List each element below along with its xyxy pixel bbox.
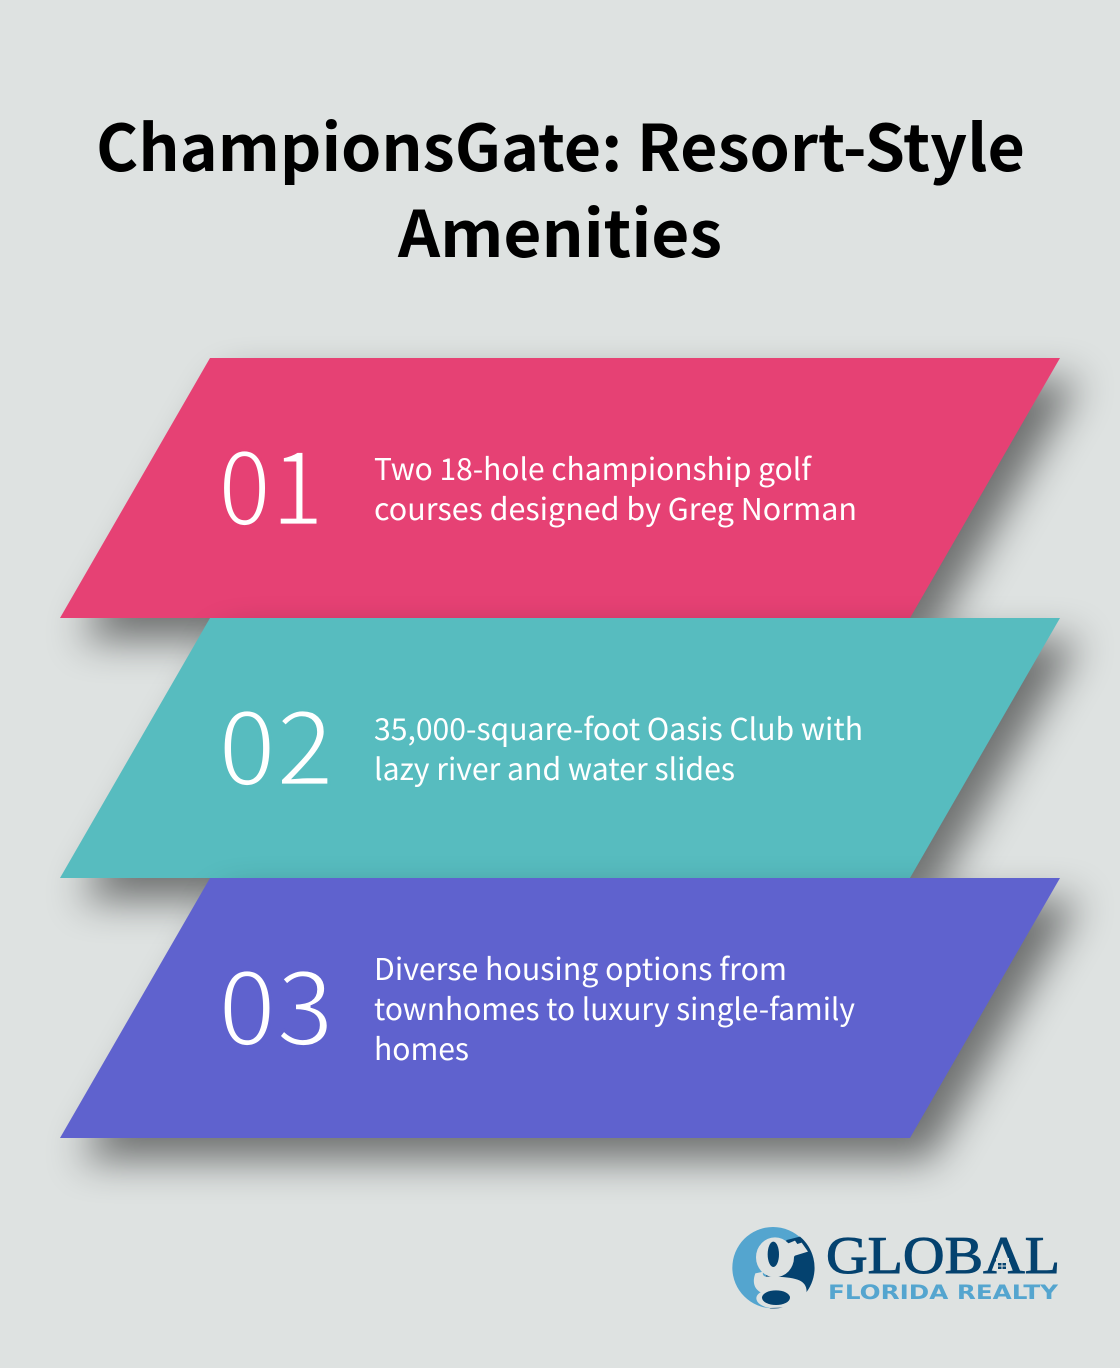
text: oasis club: 35,000-square-foot Oasis Club with	[374, 705, 863, 749]
title	[96, 98, 1025, 276]
text: housing	[374, 945, 855, 1069]
text: housing: townhomes to luxury single-family	[374, 985, 855, 1029]
text: housing: homes	[374, 1025, 469, 1069]
icon: g in circle	[732, 1227, 815, 1309]
number 03: 03	[218, 926, 334, 1075]
panel: 03 housing	[60, 878, 1080, 1160]
panel: 01 golf courses	[60, 358, 1080, 640]
logo: Global Florida Realty	[732, 1227, 1060, 1309]
number 02: 02	[218, 666, 334, 815]
text: oasis club	[374, 705, 863, 789]
logo: Global Florida Realty: FLORIDA REALTY	[828, 1281, 1059, 1304]
panel: 02 oasis club	[60, 618, 1080, 900]
number 01: 01	[218, 406, 324, 555]
text: golf courses	[374, 445, 857, 529]
text: housing: Diverse housing options from	[374, 945, 787, 989]
logo: Global Florida Realty: GLOBAL	[826, 1227, 1060, 1285]
title: ChampionsGate: Resort-Style	[96, 98, 1025, 190]
icon: house window in A	[996, 1258, 1009, 1269]
text: golf courses: Two 18-hole championship golf	[374, 445, 812, 489]
text: oasis club: lazy river and water slides	[374, 745, 735, 789]
text: golf courses: courses designed by Greg Norman	[374, 485, 857, 529]
title: Amenities	[397, 184, 722, 276]
